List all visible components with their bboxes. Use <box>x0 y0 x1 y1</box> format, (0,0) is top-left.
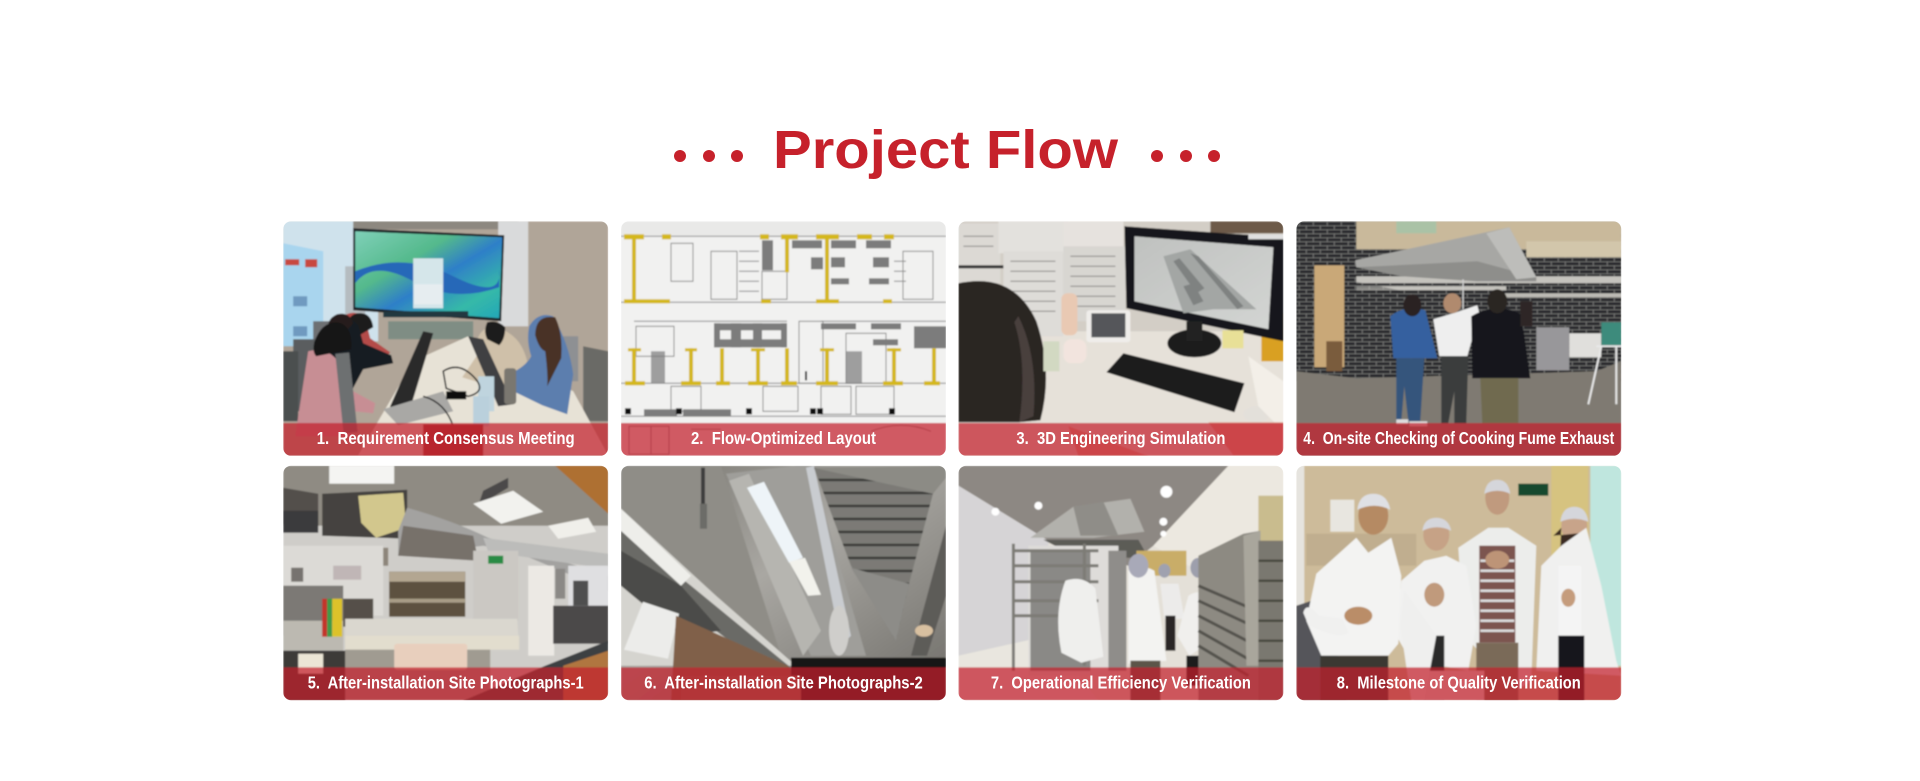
title: Project Flow with dot ornaments <box>674 120 1220 180</box>
photo: team in white coats <box>1296 466 1621 701</box>
caption 3: 3. 3D Engineering Simulation <box>1016 428 1225 448</box>
card 2: flow-optimized layout <box>621 221 946 456</box>
caption 2: 2. Flow-Optimized Layout <box>691 428 876 448</box>
photo: site inspection under hood <box>1296 221 1621 456</box>
caption 7: 7. Operational Efficiency Verification <box>991 672 1251 692</box>
card 7: operational efficiency verification <box>958 466 1283 701</box>
card 8: milestone of quality verification <box>1296 466 1621 701</box>
right dots <box>1151 150 1220 162</box>
caption 6: 6. After-installation Site Photographs-2 <box>644 672 923 692</box>
caption 8: 8. Milestone of Quality Verification <box>1337 672 1581 692</box>
photo: workers at rack and oven <box>958 466 1283 701</box>
photo: installed kitchen <box>283 466 608 701</box>
caption 4: 4. On-site Checking of Cooking Fume Exhaust <box>1303 428 1614 448</box>
photo: meeting room <box>283 221 608 456</box>
caption 5: 5. After-installation Site Photographs-1 <box>308 672 584 692</box>
left dots <box>674 150 743 162</box>
photo: engineer at monitor <box>958 221 1283 456</box>
card 4: on-site checking of cooking fume exhaust <box>1296 221 1621 456</box>
heading: Project Flow <box>773 120 1119 180</box>
card 1: requirement consensus meeting <box>283 221 608 456</box>
card 6: after-installation site photographs 2 <box>621 466 946 701</box>
photo: stainless hood interior <box>621 466 946 701</box>
card 3: 3D engineering simulation <box>958 221 1283 456</box>
photo: floor plan drawing <box>621 221 946 456</box>
card 5: after-installation site photographs 1 <box>283 466 608 701</box>
caption 1: 1. Requirement Consensus Meeting <box>317 428 575 448</box>
